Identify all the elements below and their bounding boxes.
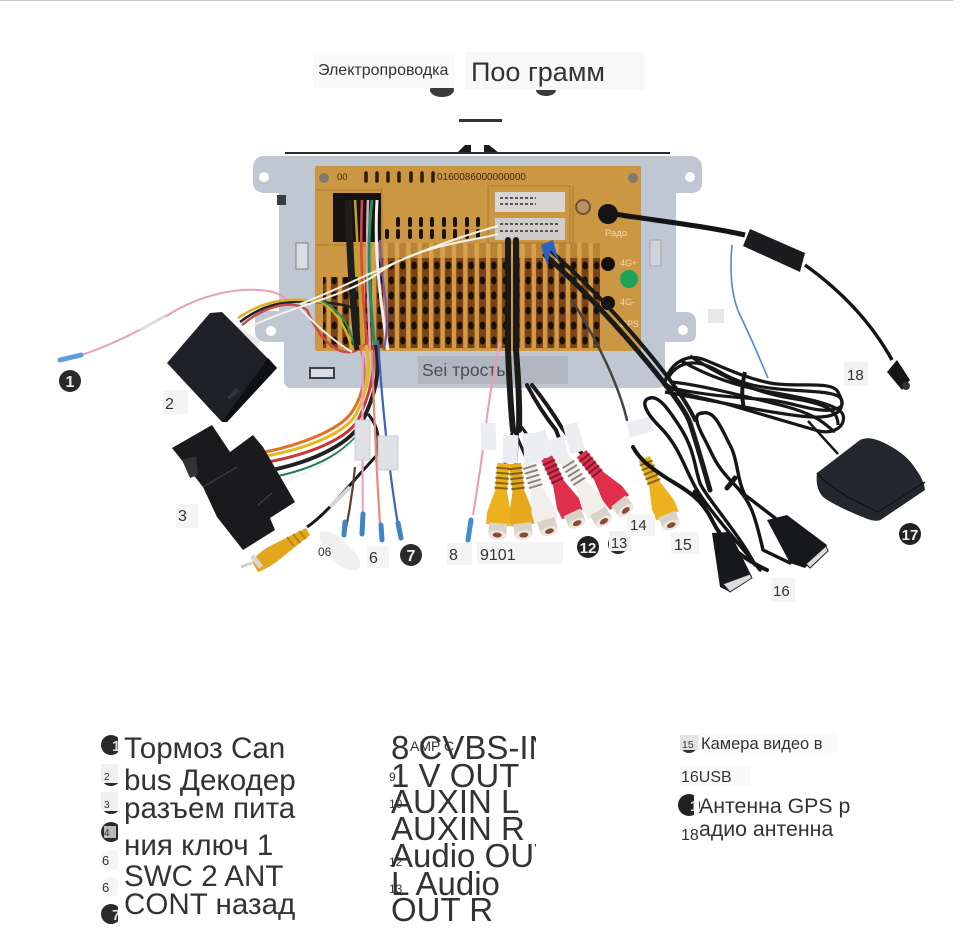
label 8 bbox=[447, 543, 472, 565]
legend: right column: 15 bbox=[682, 739, 694, 751]
label 3 bbox=[176, 504, 198, 528]
label 6: 6 bbox=[369, 550, 378, 567]
marker 17: 17 bbox=[902, 527, 918, 544]
gold backplate bbox=[315, 166, 641, 351]
legend: left column text: bus Декодер bbox=[124, 764, 296, 797]
serial print: 00 bbox=[337, 172, 348, 183]
label 9101: 9101 bbox=[480, 547, 516, 564]
legend: middle column text: 13 bbox=[389, 882, 403, 896]
antenna sockets bbox=[576, 200, 590, 214]
icon: decoder box bbox=[167, 312, 277, 422]
icon: USB cables bbox=[633, 398, 828, 592]
icon: GPS antenna puck bbox=[817, 438, 925, 521]
legend: left column markers: 1 bbox=[112, 738, 120, 755]
label 18: 18 bbox=[847, 367, 864, 384]
legend: left column markers: 4 bbox=[104, 828, 110, 839]
legend: left column markers: 2 bbox=[104, 772, 110, 783]
head unit rear panel: Радо bbox=[605, 228, 627, 239]
marker 7 bbox=[400, 544, 422, 566]
legend: middle column text bbox=[390, 736, 536, 922]
legend: middle column text: L Audio bbox=[391, 865, 500, 902]
label 06 bbox=[318, 531, 360, 570]
legend: left column text: SWC 2 ANT bbox=[124, 860, 284, 893]
legend: left column markers: 6 bbox=[102, 853, 109, 868]
label 13 bbox=[608, 531, 631, 554]
label 15: 15 bbox=[674, 537, 692, 554]
head unit rear panel: 4G- bbox=[620, 297, 635, 307]
label 2 bbox=[163, 390, 188, 414]
legend: right column: адио антенна bbox=[699, 817, 833, 841]
title: Поо грамм bbox=[471, 57, 605, 87]
blue clip bbox=[541, 240, 559, 265]
title bbox=[313, 52, 645, 97]
callout: Sei label: Sei трость bbox=[422, 360, 506, 380]
head unit rear panel: GPS bbox=[620, 319, 639, 329]
marker 12: 12 bbox=[580, 540, 596, 557]
label 16: 16 bbox=[773, 583, 790, 600]
legend: left column markers: 7 bbox=[112, 907, 120, 924]
label 18 bbox=[844, 362, 868, 386]
marker 17 bbox=[899, 523, 921, 545]
callout: Sei label bbox=[418, 356, 568, 384]
legend: right column bbox=[678, 733, 850, 844]
legend: middle column text: 12 bbox=[389, 855, 403, 869]
label 9101 bbox=[477, 542, 563, 564]
upper dots bbox=[387, 219, 478, 237]
label 6 bbox=[367, 546, 389, 568]
label 8: 8 bbox=[449, 547, 458, 564]
legend: middle column text: 9 bbox=[389, 770, 396, 784]
RCA plugs: items 9-15 bbox=[485, 423, 684, 541]
label 3: 3 bbox=[178, 508, 187, 525]
legend: middle column text: OUT R bbox=[391, 891, 493, 928]
label 14 bbox=[627, 514, 655, 536]
label 14: 14 bbox=[630, 517, 647, 534]
power socket bbox=[333, 193, 381, 242]
wire: item 8 pink bbox=[468, 342, 500, 540]
title underline bbox=[459, 119, 502, 122]
icon: reverse camera RCA bbox=[241, 414, 378, 572]
legend: left column markers: 6 bbox=[102, 880, 109, 895]
marker 1 bbox=[59, 370, 81, 392]
marker 1: 1 bbox=[66, 374, 75, 391]
label 15 bbox=[671, 532, 699, 554]
legend: middle column text: AMP C bbox=[410, 738, 454, 754]
label 2: 2 bbox=[165, 396, 174, 413]
cables into RCA bbox=[505, 240, 710, 490]
serial print bbox=[337, 172, 526, 183]
legend: right column: 1 bbox=[690, 798, 698, 815]
connectors bbox=[495, 192, 565, 212]
legend: left column text bbox=[124, 732, 296, 921]
legend: right column: Антенна GPS р bbox=[699, 794, 850, 818]
label 16 bbox=[771, 578, 795, 602]
head unit rear panel: 4G+ bbox=[620, 258, 637, 268]
legend: left column text: ния ключ 1 bbox=[124, 829, 273, 862]
legend: middle column text: 1 V OUT bbox=[391, 757, 519, 794]
wire: item 1 brake bbox=[60, 290, 291, 360]
legend: left column text: Тормоз Can bbox=[124, 732, 285, 765]
legend: middle column text: AUXIN R bbox=[391, 810, 525, 847]
wire harness bbox=[235, 200, 498, 484]
legend: middle column text: 8 CVBS-IN bbox=[391, 729, 552, 766]
icon: key power connector bbox=[172, 425, 295, 550]
marker 7: 7 bbox=[407, 548, 416, 565]
metal chassis bbox=[253, 156, 702, 388]
wires with blue tips: items 5 6 7 bbox=[344, 340, 401, 540]
legend: right column: 18 bbox=[681, 827, 699, 844]
serial print: 0160086000000000 bbox=[437, 172, 526, 183]
legend: middle column text: 10 bbox=[389, 797, 403, 811]
label 06: 06 bbox=[318, 545, 332, 559]
legend: right column: Камера видео в bbox=[701, 735, 823, 753]
head unit rear panel bbox=[253, 145, 702, 388]
legend: right column: 16USB bbox=[681, 769, 732, 786]
icon: GPS cable coil bbox=[664, 356, 843, 454]
icon: radio antenna cable bbox=[608, 213, 910, 390]
marker 12 bbox=[577, 536, 599, 558]
title: Электропроводка bbox=[318, 62, 449, 79]
label 13: 13 bbox=[611, 536, 627, 552]
legend: middle column text: AUXIN L bbox=[391, 783, 519, 820]
legend: left column text: разъем пита bbox=[124, 792, 296, 825]
legend: left column text: CONT назад bbox=[124, 888, 295, 921]
top edge line bbox=[0, 0, 953, 1]
legend: middle column text: Audio OUT bbox=[391, 837, 554, 874]
legend: left column markers: 3 bbox=[104, 800, 110, 811]
legend: left column markers bbox=[101, 730, 124, 926]
